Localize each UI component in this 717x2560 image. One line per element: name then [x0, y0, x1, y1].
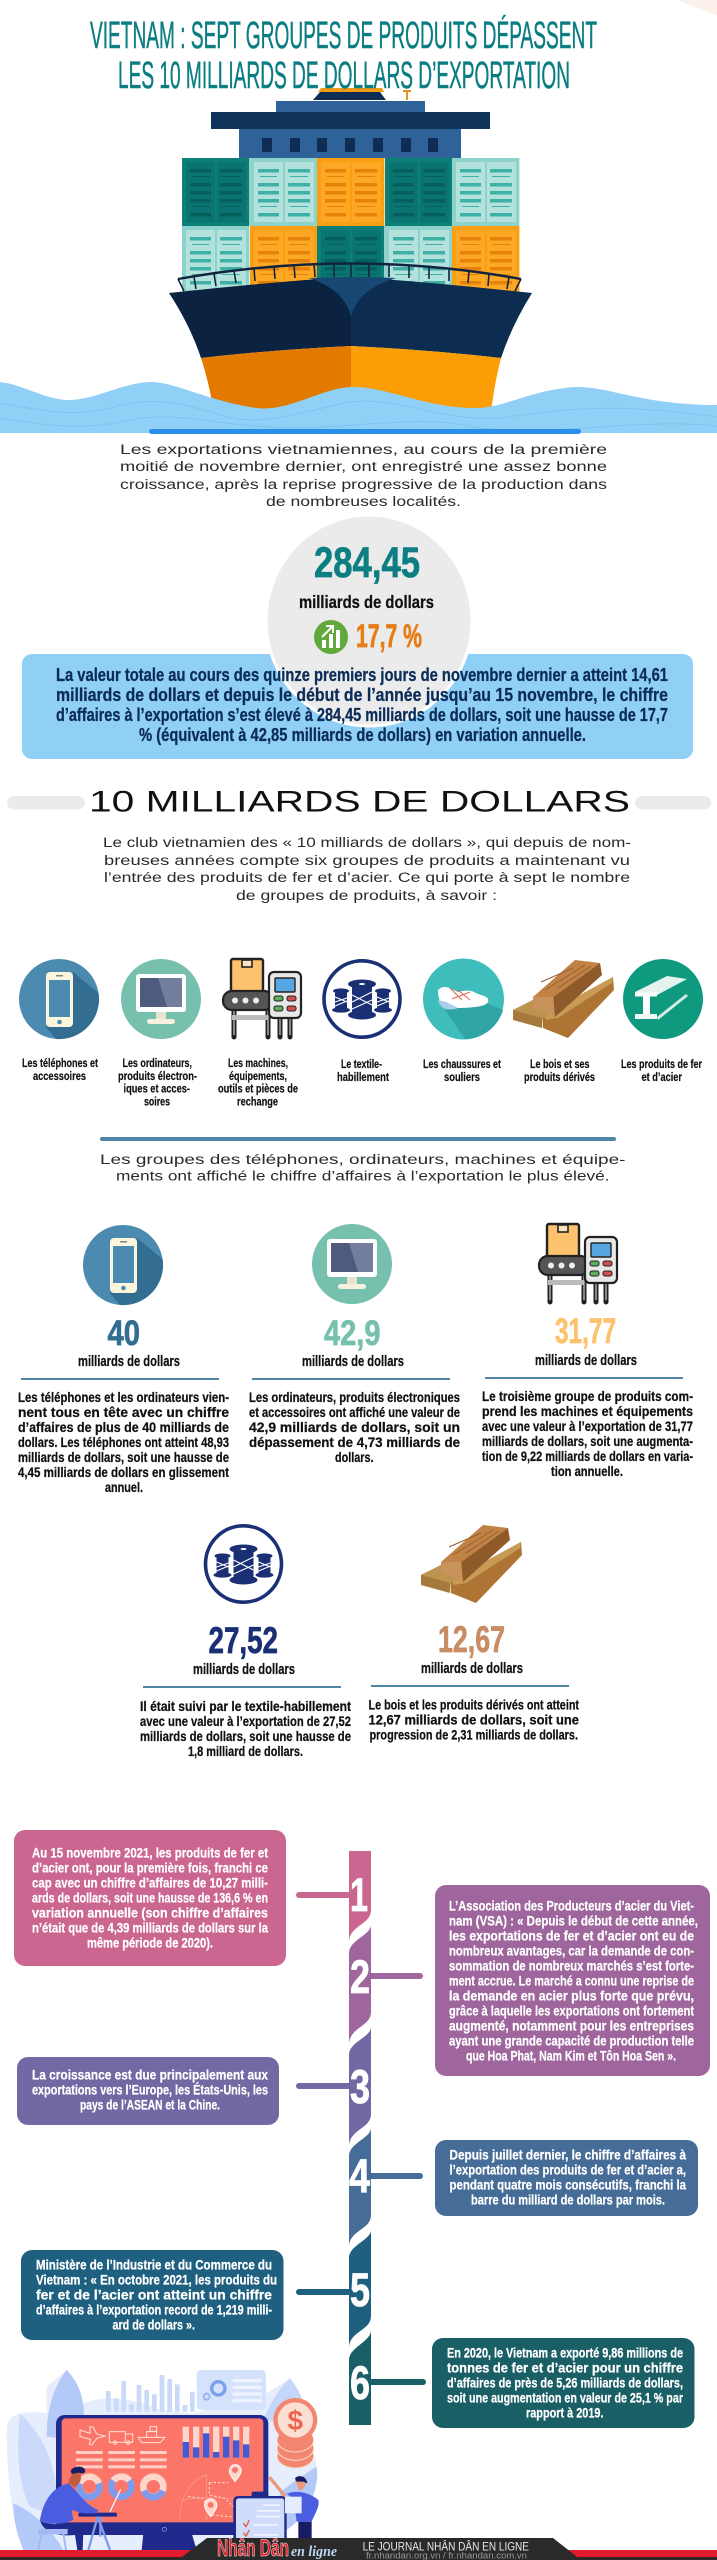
club text: breuses années compte six groupes de produits a maintenant vu — [104, 853, 630, 868]
groups text — [100, 1152, 626, 1184]
heading: 10 milliards de dollars: 10 MILLIARDS DE DOLLARS — [89, 786, 630, 819]
body text: milliards de dollars, soit une hausse de — [18, 1450, 229, 1465]
ship hull — [169, 277, 532, 420]
divider bar — [100, 1137, 616, 1141]
callout 2: la demande en acier plus forte que prévu, — [449, 1989, 694, 2004]
background leaves — [7, 2370, 317, 2550]
callout 1: variation annuelle (son chiffre d’affaires — [32, 1906, 268, 1921]
callout 5: Vietnam : « En octobre 2021, les produits du — [36, 2272, 277, 2287]
callout 2 — [371, 1885, 710, 2076]
body text: avec une valeur à l’exportation de 27,52 — [140, 1714, 351, 1729]
callout 4: barre du milliard de dollars par mois. — [471, 2192, 665, 2207]
dashboard icons — [80, 2427, 165, 2445]
callout 3: pays de l’ASEAN et la Chine. — [80, 2097, 220, 2112]
body text — [249, 1390, 460, 1465]
club text: de groupes de produits, à savoir : — [236, 888, 497, 903]
body text: milliards de dollars, soit une hausse de — [140, 1729, 351, 1744]
ship bridge — [211, 88, 490, 158]
body text: d’affaires de plus de 40 milliards de — [18, 1420, 229, 1435]
callout 1: même période de 2020). — [87, 1936, 213, 1951]
step numbers: 4 — [349, 2149, 370, 2202]
stat: 17,7 %: 17,7 % — [356, 618, 422, 654]
summary text: % (équivalent à 42,85 milliards de dollars) en variation annuelle. — [139, 724, 586, 745]
labels: Les machines, — [228, 1058, 288, 1070]
callout 3 — [17, 2057, 350, 2125]
stat: 31,77: 31,77 — [555, 1312, 616, 1351]
person right — [268, 2476, 319, 2538]
donut charts — [79, 2477, 163, 2497]
labels: soires — [144, 1096, 170, 1108]
callout 4: Depuis juillet dernier, le chiffre d’affaires à — [450, 2147, 686, 2162]
body text: dollars. — [335, 1450, 374, 1465]
groups text: Les groupes des téléphones, ordinateurs, machines et équipe- — [100, 1152, 626, 1167]
body text: Il était suivi par le textile-habillement — [140, 1699, 351, 1714]
body text: et accessoires ont affiché une valeur de — [249, 1405, 460, 1420]
stat: 27,52: 27,52 — [208, 1620, 278, 1661]
red band — [0, 2550, 717, 2560]
stat: 42,9: 42,9 — [324, 1314, 380, 1353]
panel: textile 27,52 — [140, 1526, 351, 1759]
labels: rechange — [237, 1096, 278, 1108]
body text: dépassement de 4,73 milliards de — [249, 1435, 460, 1450]
background bars — [106, 2375, 195, 2412]
labels: accessoires — [33, 1071, 86, 1083]
summary text — [56, 664, 668, 745]
callout 5: Ministère de l’Industrie et du Commerce du — [36, 2257, 272, 2272]
body text: progression de 2,31 milliards de dollars. — [370, 1728, 578, 1743]
blue summary box — [22, 654, 693, 759]
icon: phone — [19, 959, 99, 1039]
labels: Le bois et ses — [530, 1059, 590, 1071]
panel: total exports — [22, 515, 693, 759]
body text: 12,67 milliards de dollars, soit une — [368, 1712, 579, 1728]
gear card — [197, 2370, 266, 2410]
title — [90, 14, 597, 97]
labels: Les téléphones et — [22, 1058, 98, 1070]
water waves — [0, 382, 717, 433]
labels — [22, 1058, 702, 1108]
body text — [140, 1699, 351, 1759]
callout 3: exportations vers l’Europe, les États-Unis, les — [32, 2083, 268, 2098]
club text: l’entrée des produits de fer et d’acier. Ce qui porte à sept le nombre — [104, 870, 630, 885]
monitor — [56, 2415, 268, 2550]
labels: produits dérivés — [524, 1072, 595, 1084]
icon: phone — [83, 1225, 163, 1305]
panel: machines 31,77 — [482, 1224, 693, 1479]
panel: seven product groups — [19, 958, 703, 1108]
illustration: analyst at dashboard — [7, 2370, 319, 2550]
dashboard bar chart — [183, 2427, 249, 2458]
callout 5: d’affaires à l’exportation record de 1,219 milli- — [36, 2302, 272, 2317]
body text: dollars. Les téléphones ont atteint 48,93 — [18, 1435, 229, 1450]
coins: $ — [288, 2405, 304, 2436]
icon: machine — [539, 1224, 617, 1302]
step numbers: 2 — [350, 1950, 370, 2003]
intro text: Les exportations vietnamiennes, au cours de la première — [120, 442, 607, 457]
dashboard lines — [76, 2451, 167, 2468]
callout 6: tonnes de fer et d’acier pour un chiffre — [447, 2360, 683, 2375]
labels: iques et acces- — [124, 1084, 190, 1096]
stat unit: milliards de dollars — [78, 1353, 180, 1370]
body text: Le bois et les produits dérivés ont atteint — [368, 1698, 579, 1712]
logo: en ligne: en ligne — [291, 2544, 337, 2560]
icon: machine — [223, 959, 301, 1037]
icon: growth chart — [314, 620, 348, 654]
stat unit: milliards de dollars — [299, 592, 434, 612]
corner decoration — [677, 0, 717, 16]
groups text: ments ont affiché le chiffre d’affaires à l’exportation le plus élevé. — [116, 1169, 610, 1184]
intro text — [120, 442, 607, 509]
body text — [368, 1698, 579, 1743]
callout 6 — [371, 2338, 694, 2428]
callout 1 — [14, 1830, 350, 1966]
illustration: container ship — [0, 88, 717, 434]
labels: Les chaussures et — [423, 1059, 501, 1071]
grey circle — [266, 515, 472, 726]
icon: shoe — [423, 958, 504, 1040]
icon: wood — [513, 960, 614, 1038]
dark tab — [178, 2538, 581, 2560]
stat: 12,67: 12,67 — [438, 1619, 505, 1660]
body text — [18, 1390, 229, 1495]
callout 1: ards de dollars, soit une hausse de 136,6 % en — [32, 1891, 268, 1906]
step numbers: 6 — [350, 2356, 370, 2409]
panel: wood 12,67 — [368, 1525, 579, 1743]
blue bar — [149, 429, 581, 434]
club text — [103, 835, 631, 903]
step numbers — [349, 1868, 370, 2409]
labels: produits électron- — [118, 1071, 197, 1083]
panel: phones 40 — [18, 1225, 229, 1495]
body text: annuel. — [105, 1480, 143, 1495]
labels: et d’acier — [642, 1072, 682, 1084]
body text: Les ordinateurs, produits électroniques — [249, 1390, 460, 1405]
footer title: LE JOURNAL NHÂN DÂN EN LIGNE — [363, 2541, 529, 2554]
labels: Le textile- — [341, 1059, 382, 1071]
body text: tion annuelle. — [551, 1464, 623, 1479]
callout 1: d’acier ont, pour la première fois, franchi ce — [32, 1861, 268, 1876]
timeline ribbon — [349, 1851, 371, 2425]
body text: 4,45 milliards de dollars en glissement — [18, 1465, 229, 1480]
step numbers: 3 — [350, 2060, 370, 2113]
ship railing — [178, 263, 521, 291]
body text — [482, 1389, 693, 1479]
heading: 10 milliards de dollars — [7, 786, 711, 819]
icon: steel beam — [623, 959, 703, 1039]
callout 1: Au 15 novembre 2021, les produits de fer et — [32, 1846, 268, 1861]
icon: textile — [206, 1526, 282, 1602]
footer — [0, 2535, 717, 2560]
body text: nent tous en tête avec un chiffre — [18, 1405, 229, 1420]
callout 6: rapport à 2019. — [526, 2405, 604, 2420]
stat: 40: 40 — [108, 1314, 140, 1353]
stat unit: milliards de dollars — [193, 1661, 295, 1678]
labels: Les ordinateurs, — [122, 1058, 192, 1070]
labels: habillement — [337, 1072, 389, 1084]
step numbers: 5 — [350, 2263, 370, 2316]
stat unit: milliards de dollars — [535, 1352, 637, 1369]
body text: Les téléphones et les ordinateurs vien- — [18, 1390, 229, 1405]
containers — [182, 158, 519, 294]
person left — [38, 2467, 121, 2550]
icon: textile — [324, 961, 400, 1037]
icon: wood — [421, 1525, 522, 1603]
callout 5: ard de dollars ». — [112, 2317, 195, 2332]
icon: monitor — [121, 959, 201, 1039]
step numbers: 1 — [350, 1868, 368, 1921]
intro text: de nombreuses localités. — [266, 494, 461, 509]
callout 5: fer et de l’acier ont atteint un chiffre — [36, 2287, 272, 2302]
coins — [273, 2398, 317, 2468]
intro text: moitié de novembre dernier, ont enregistré une assez bonne — [120, 459, 607, 474]
callout 5 — [21, 2250, 350, 2340]
icon: monitor — [312, 1224, 392, 1304]
callout 1: n’était que de 4,39 milliards de dollars sur la — [32, 1921, 268, 1936]
intro text: croissance, après la reprise progressive de la production dans — [120, 477, 607, 492]
stat unit: milliards de dollars — [421, 1660, 523, 1677]
clipboard — [233, 2492, 287, 2547]
labels: équipements, — [229, 1071, 287, 1083]
callout 1: cap avec un chiffre d’affaires de 10,27 milli- — [32, 1876, 268, 1891]
body text: 1,8 milliard de dollars. — [188, 1744, 303, 1759]
stat: 284,45: 284,45 — [314, 539, 420, 587]
labels: souliers — [444, 1072, 480, 1084]
body text: 42,9 milliards de dollars, soit un — [249, 1420, 460, 1435]
map with pins — [180, 2465, 243, 2520]
body text: prend les machines et équipements — [482, 1404, 693, 1419]
callout 3: La croissance est due principalement aux — [32, 2068, 268, 2083]
stat unit: milliards de dollars — [302, 1353, 404, 1370]
club text: Le club vietnamien des « 10 milliards de dollars », qui depuis de nom- — [103, 835, 631, 850]
callout 2: les exportations de fer et d’acier ont eu de — [449, 1929, 694, 1944]
panel: computers 42,9 — [249, 1224, 460, 1465]
labels: outils et pièces de — [218, 1084, 298, 1096]
callout 4 — [371, 2140, 698, 2216]
